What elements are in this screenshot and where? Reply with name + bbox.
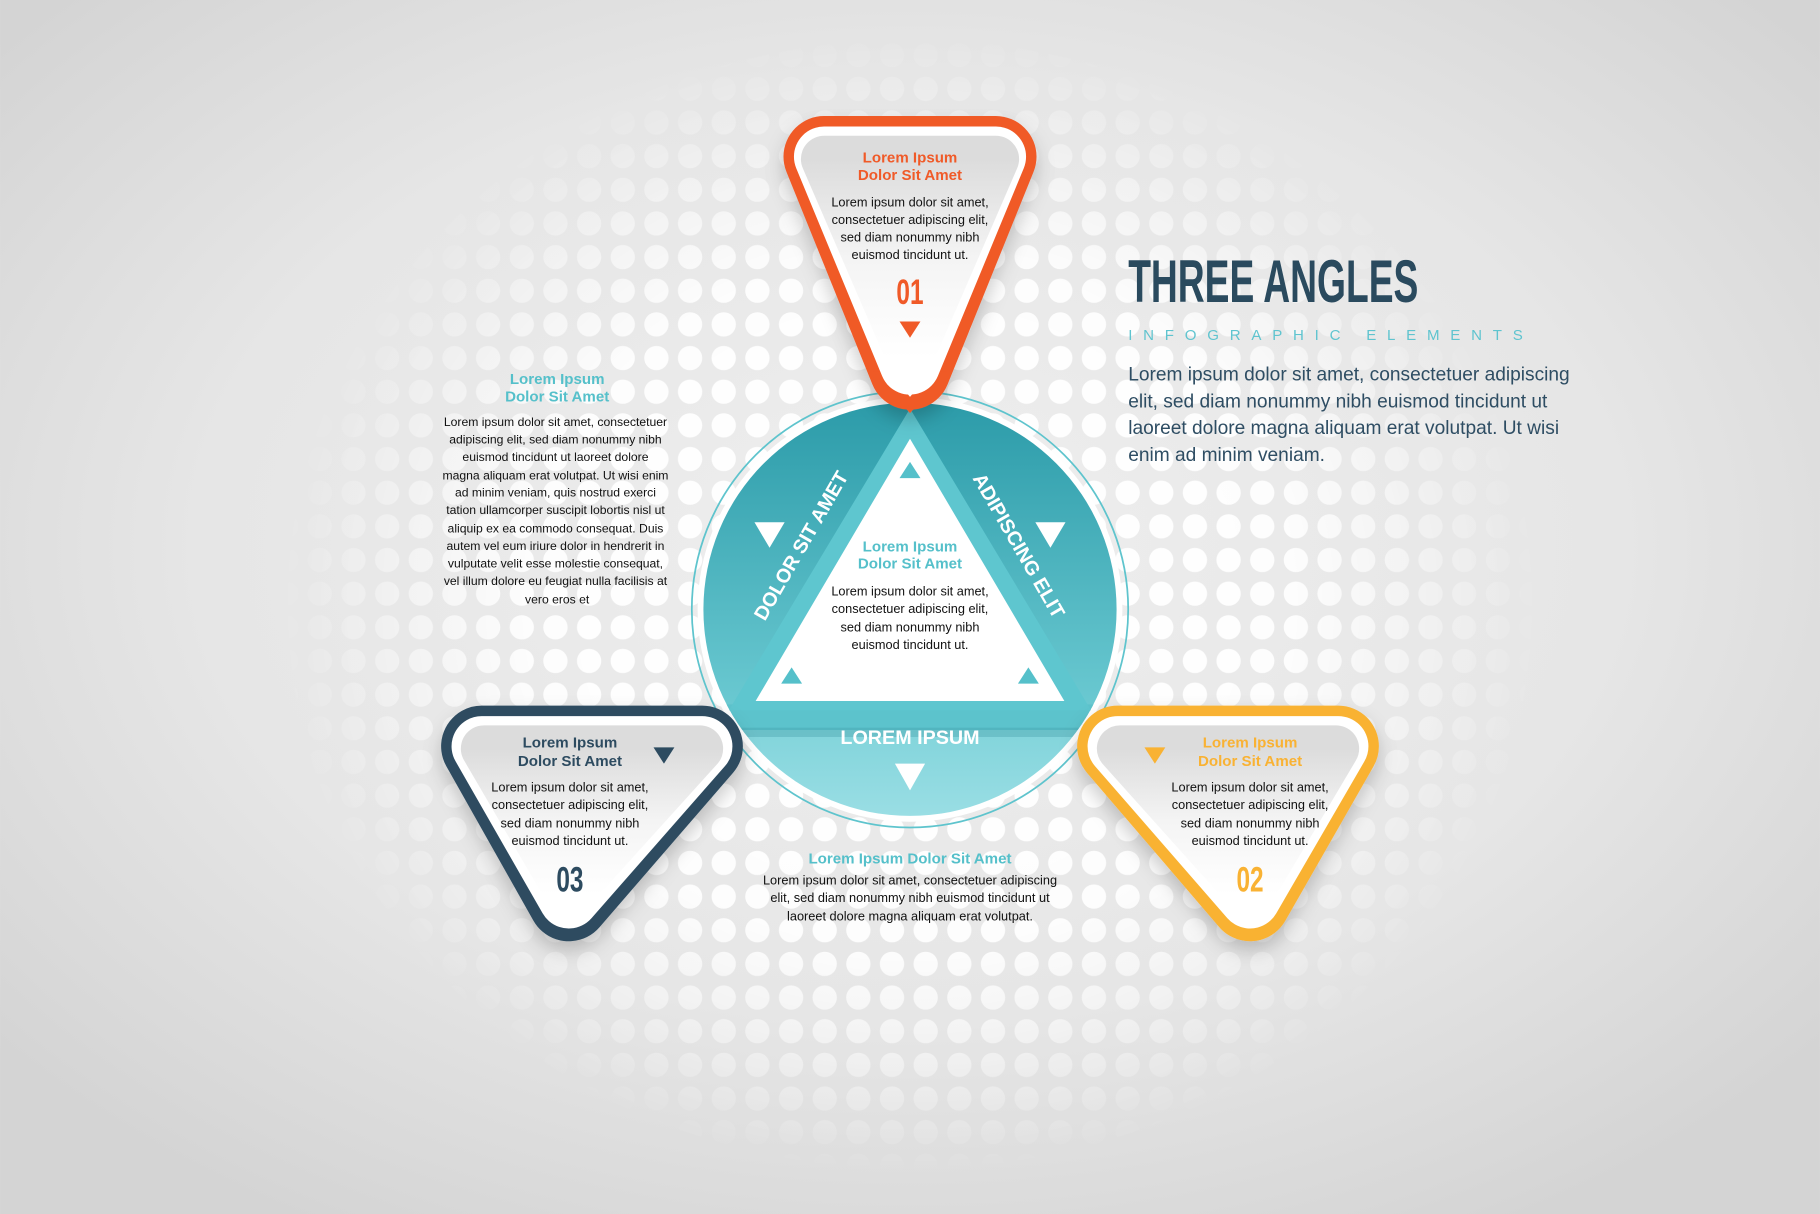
panel: 03 left pin: Lorem Ipsum [523, 734, 617, 751]
text block: intro paragraph: elit, sed diam nonummy nibh euismod tincidunt ut [1128, 391, 1548, 412]
text block: bottom description: Lorem Ipsum Dolor Sit Amet [808, 850, 1012, 867]
text block: bottom description [763, 850, 1057, 923]
text block: left description: Lorem ipsum dolor sit amet, consectetuer [444, 415, 667, 429]
text block: left description: magna aliquam erat volutpat. Ut wisi enim [442, 468, 668, 482]
panel: 02 right pin: Dolor Sit Amet [1198, 753, 1302, 770]
panel: 01 top pin: sed diam nonummy nibh [841, 229, 979, 244]
subtitle: INFOGRAPHIC ELEMENTS [1128, 327, 1523, 344]
text block: left description: Dolor Sit Amet [505, 389, 609, 406]
text block: left description: ad minim veniam, quis nostrud exerci [455, 486, 656, 500]
panel: 02 right pin: Lorem Ipsum [1203, 734, 1297, 751]
text block: left description [442, 371, 672, 607]
text block: left description: autem vel eum iriure dolor in hendrerit in [447, 539, 664, 553]
icon: cyan arrows [781, 462, 1039, 684]
text block: left description: adipiscing elit, sed diam nonummy nibh [449, 432, 662, 446]
panel: 02 right pin: consectetuer adipiscing elit, [1172, 797, 1328, 812]
inner triangle [729, 409, 1091, 710]
panel: 03 left pin: 03 [556, 861, 583, 899]
text block: intro paragraph: enim ad minim veniam. [1128, 445, 1325, 466]
panel: 03 left pin: sed diam nonummy nibh [500, 816, 639, 831]
center text: Lorem Ipsum [863, 538, 957, 555]
panel: 01 top pin: Lorem Ipsum [863, 149, 957, 166]
panel: 01 top pin: consectetuer adipiscing elit, [832, 212, 988, 227]
panel: 01 top pin: Dolor Sit Amet [858, 167, 962, 184]
text block: left description: euismod tincidunt ut laoreet dolore [462, 450, 649, 464]
text block: left description: Lorem Ipsum [510, 371, 605, 388]
panel: 02 right pin: 02 [1237, 861, 1264, 899]
text block: left description: vero eros et [525, 593, 590, 607]
text block: intro paragraph: Lorem ipsum dolor sit amet, consectetuer adipiscing [1128, 365, 1570, 386]
panel: 02 right pin: Lorem ipsum dolor sit amet, [1171, 780, 1329, 795]
text block: bottom description: Lorem ipsum dolor sit amet, consectetuer adipiscing [763, 872, 1057, 887]
central circle diagram [692, 391, 1128, 836]
text block: left description: aliquip ex ea commodo consequat. Duis [448, 522, 663, 536]
panel: 02 right pin [1118, 734, 1338, 901]
text block: bottom description: elit, sed diam nonummy nibh euismod tincidunt ut [770, 890, 1050, 905]
rotated label: adipiscing elit: ADIPISCING ELIT [968, 470, 1069, 622]
panel: 03 left pin: Lorem ipsum dolor sit amet, [491, 780, 649, 795]
panel: 01 top pin: 01 [896, 274, 924, 312]
panel: 03 left pin: consectetuer adipiscing elit, [492, 797, 648, 812]
text block: left description: tation ullamcorper suscipit lobortis nisl ut [446, 503, 665, 517]
center text: sed diam nonummy nibh [841, 619, 979, 634]
text block: left description: vulputate velit esse molestie consequat, [448, 557, 663, 571]
band label: LOREM IPSUM [840, 727, 980, 749]
title: THREE ANGLES [1128, 247, 1418, 315]
panel: 01 top pin: Lorem ipsum dolor sit amet, [831, 195, 989, 210]
center text: Lorem ipsum dolor sit amet, [831, 583, 989, 598]
rotated label: dolor sit amet: DOLOR SIT AMET [750, 468, 853, 624]
panel: 03 left pin: euismod tincidunt ut. [511, 833, 628, 848]
center text: euismod tincidunt ut. [852, 637, 968, 652]
text block: bottom description: laoreet dolore magna aliquam erat volutpat. [787, 908, 1033, 923]
center text: consectetuer adipiscing elit, [832, 601, 988, 616]
icon: white arrows [754, 522, 1066, 790]
panel: 03 left pin [482, 734, 702, 901]
text block: left description: vel illum dolore eu feugiat nulla facilisis at [444, 574, 668, 588]
panel: 02 right pin: euismod tincidunt ut. [1192, 833, 1309, 848]
panel: 01 top pin: euismod tincidunt ut. [852, 247, 968, 262]
panel: 01 top pin [824, 149, 996, 413]
center text [831, 538, 989, 652]
panel: 03 left pin: Dolor Sit Amet [518, 753, 622, 770]
text block: intro paragraph: laoreet dolore magna aliquam erat volutpat. Ut wisi [1128, 418, 1559, 439]
panel: 02 right pin: sed diam nonummy nibh [1181, 816, 1320, 831]
center text: Dolor Sit Amet [858, 556, 962, 573]
